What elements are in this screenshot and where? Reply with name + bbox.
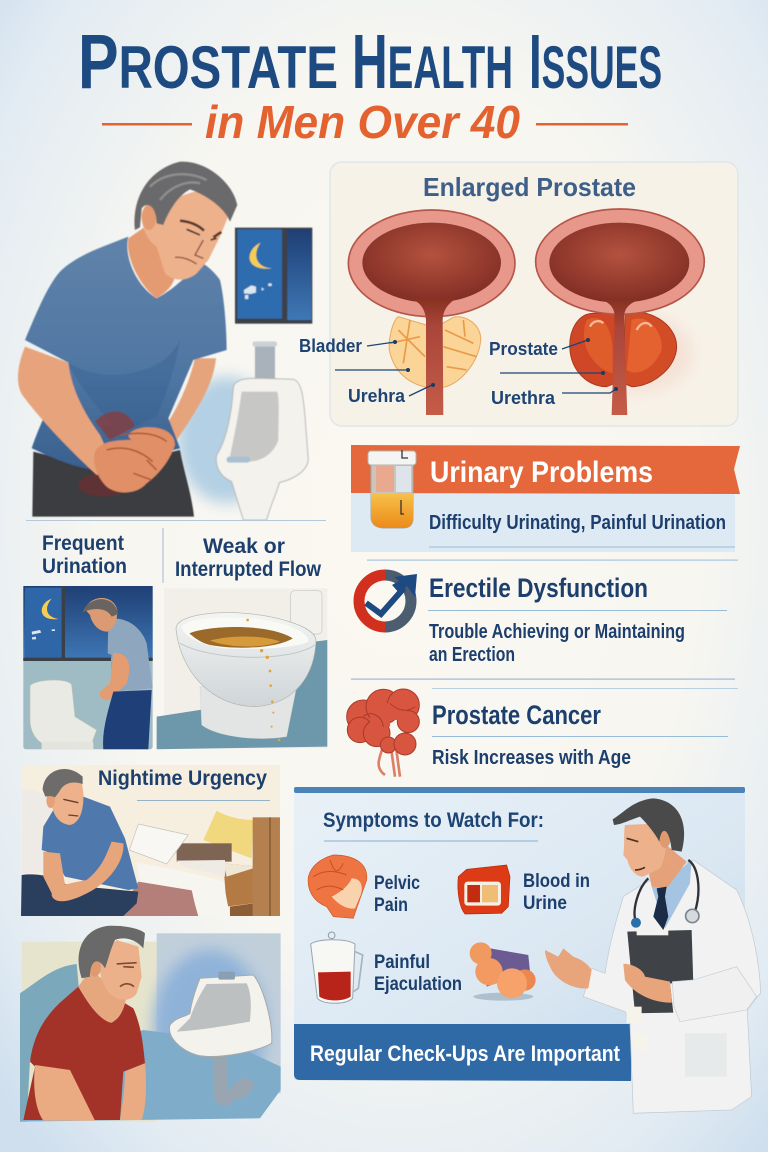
- label: blood in urine: Urine: [523, 893, 567, 914]
- icon: prostate tumor: [347, 689, 419, 777]
- banner: urinary problems: [351, 445, 740, 494]
- heading: frequent urination: [42, 532, 127, 578]
- icon: urinal: [216, 341, 308, 520]
- icon: wall urinal: [169, 972, 272, 1106]
- heading: prostate cancer: Prostate Cancer: [432, 700, 601, 730]
- title: PROSTATE: [78, 19, 338, 105]
- panel: enlarged prostate: [299, 162, 738, 426]
- banner: regular check-ups: Regular Check-Ups Are Important: [310, 1041, 621, 1066]
- diagram: normal prostate: [348, 210, 515, 415]
- heading: weak or interrupted flow: Weak or: [203, 535, 285, 558]
- icon: pelvic pain head: [308, 855, 367, 918]
- text: erectile dysfunction: an Erection: [429, 644, 515, 666]
- label: painful ejaculation: Painful: [374, 952, 430, 973]
- panel: frequent urination and weak flow: [23, 520, 327, 749]
- heading: enlarged prostate: Enlarged Prostate: [423, 172, 636, 202]
- subtitle: in Men Over 40: [205, 96, 520, 148]
- label: blood in urine: Blood in: [523, 871, 590, 892]
- diagram: enlarged prostate: [536, 209, 704, 415]
- label: pelvic pain: [374, 873, 420, 916]
- icon: blood in urine test: [458, 865, 510, 914]
- heading: frequent urination: Frequent: [42, 532, 124, 555]
- title: [78, 19, 662, 105]
- banner: regular check-ups: [294, 1024, 631, 1081]
- labels: diagram: Urehra: [348, 386, 406, 406]
- icon: testicular anatomy: [470, 942, 536, 1001]
- heading: symptoms: Symptoms to Watch For:: [323, 809, 544, 832]
- illustration: man in red shirt with wall urinal: [20, 926, 281, 1122]
- panel: nighttime urgency: [21, 765, 280, 916]
- icon: male symbol with check: [359, 574, 417, 627]
- text: prostate cancer: Risk Increases with Age: [432, 747, 631, 769]
- illustration: man sitting on bed: [21, 765, 280, 916]
- icon: night window: [235, 228, 312, 324]
- panel: symptoms to watch for: [294, 787, 761, 1113]
- figure: doctor: [545, 798, 761, 1113]
- panel: prostate cancer: [347, 688, 738, 777]
- illustration: man in pain with urinal and night window: [18, 162, 312, 520]
- heading: nightime urgency: Nightime Urgency: [98, 767, 267, 790]
- text: erectile dysfunction: [429, 621, 685, 666]
- label: pelvic pain: Pelvic: [374, 873, 420, 894]
- title: HEALTH: [352, 19, 513, 105]
- illustration: night urination scene: [23, 586, 153, 749]
- label: pelvic pain: Pain: [374, 895, 408, 916]
- labels: diagram: Urethra: [491, 388, 556, 408]
- heading: frequent urination: Urination: [42, 555, 127, 578]
- figure: man: [18, 162, 237, 517]
- labels: diagram: Bladder: [299, 336, 362, 356]
- label: painful ejaculation: Ejaculation: [374, 974, 462, 995]
- labels: diagram: Prostate: [489, 339, 558, 359]
- labels: diagram: [299, 336, 618, 408]
- icon: beaker with blood: [311, 932, 363, 1003]
- heading: erectile dysfunction: Erectile Dysfunction: [429, 573, 648, 603]
- figure: seated man red shirt: [23, 926, 146, 1121]
- illustration: toilet with weak flow: [157, 588, 327, 749]
- panel: urinary problems: [351, 445, 740, 552]
- figure: seated man: [21, 769, 138, 916]
- text: erectile dysfunction: Trouble Achieving or Maintaining: [429, 621, 685, 643]
- label: blood in urine: [523, 871, 590, 914]
- label: painful ejaculation: [374, 952, 462, 995]
- heading: weak or interrupted flow: [175, 535, 322, 581]
- panel: erectile dysfunction: [359, 573, 727, 666]
- icon: specimen cup: [368, 450, 416, 528]
- heading: urinary problems: Urinary Problems: [430, 456, 653, 489]
- title: ISSUES: [529, 19, 662, 105]
- heading: weak or interrupted flow: Interrupted Flow: [175, 558, 322, 581]
